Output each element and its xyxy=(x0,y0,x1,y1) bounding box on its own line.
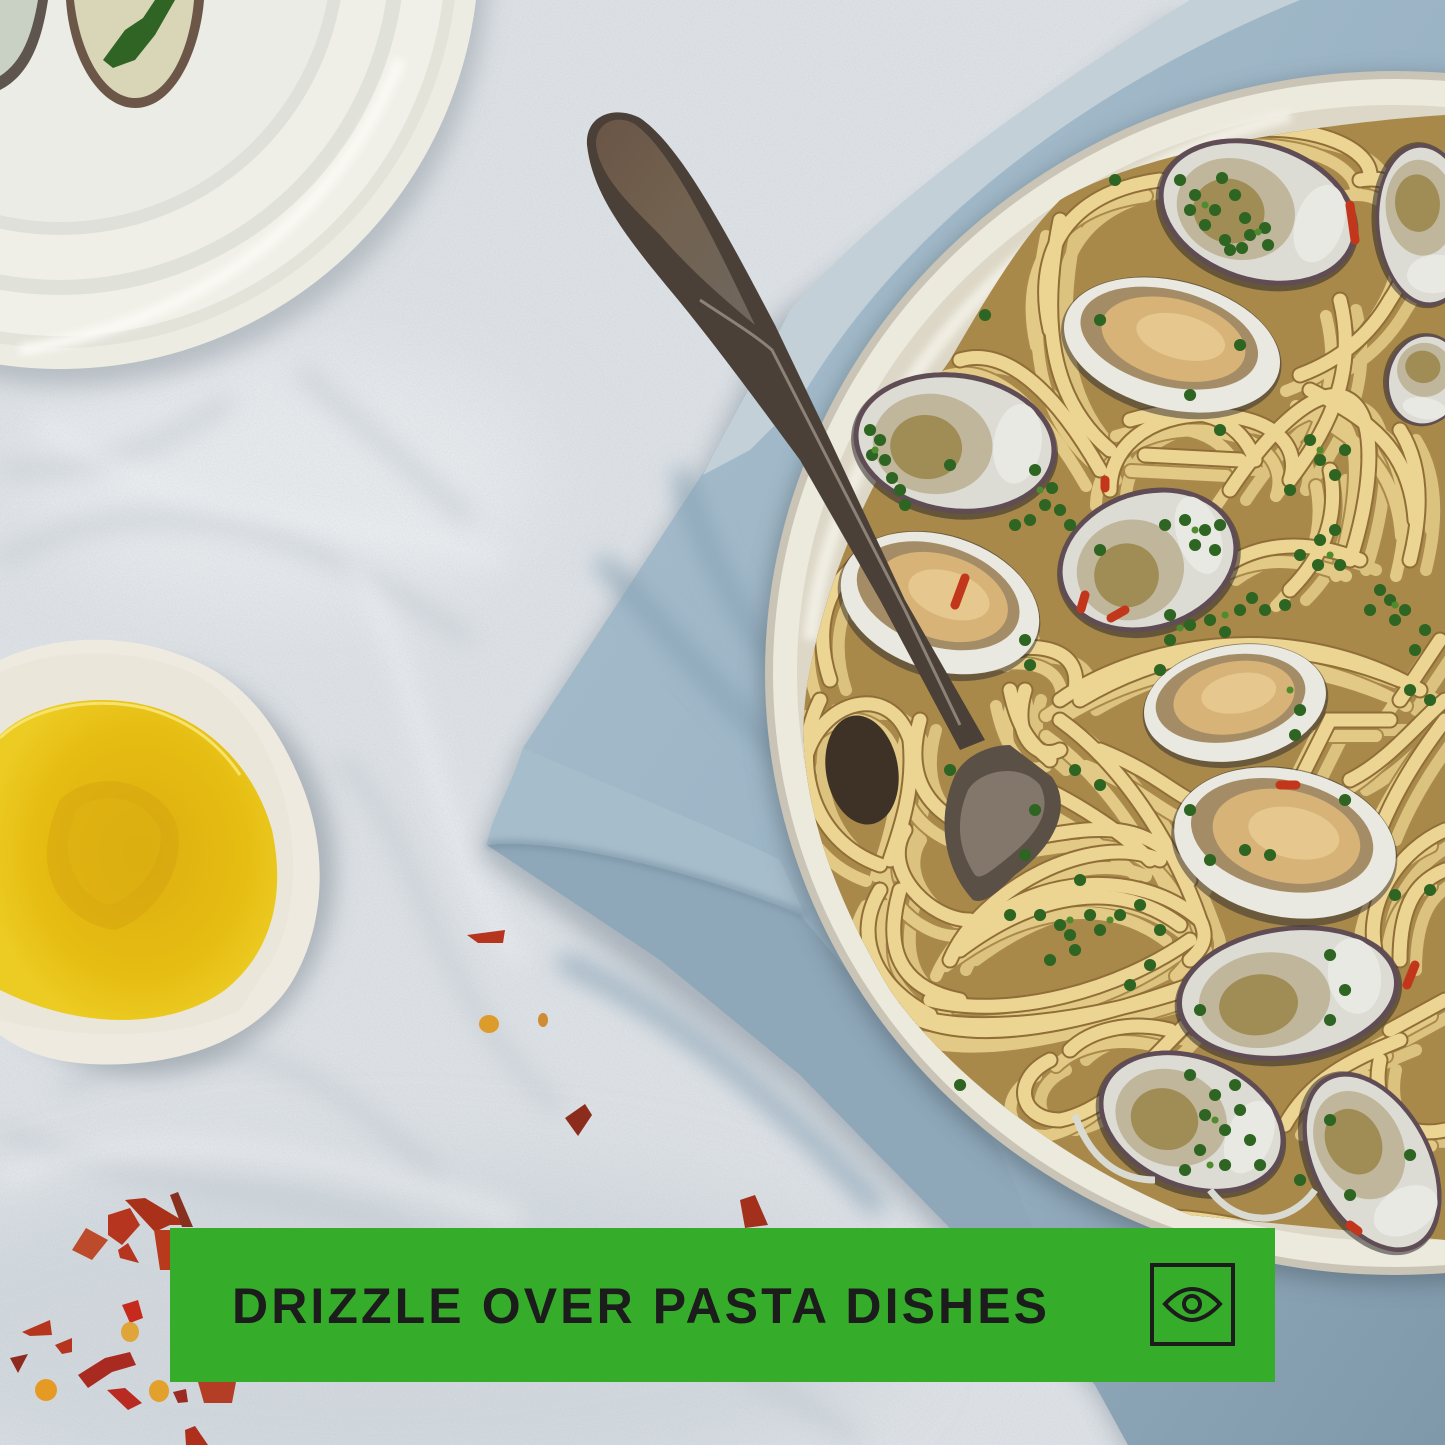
olive oil dish xyxy=(0,640,335,1075)
green banner xyxy=(170,1228,1275,1382)
chopped parsley xyxy=(870,178,1430,1195)
icon: eye in a square xyxy=(1152,1265,1233,1344)
linguine strands xyxy=(791,129,1445,1256)
bowl rim and wall xyxy=(765,71,1445,1275)
blue linen napkin xyxy=(481,0,1445,1445)
pasta sauce base xyxy=(804,115,1445,1240)
spoon resting in bowl xyxy=(587,112,1061,901)
chili flakes in bowl xyxy=(955,205,1415,1231)
olive oil pool xyxy=(0,700,277,1020)
white plate with clams, top left xyxy=(0,0,488,386)
clam shells on plate xyxy=(0,0,204,108)
large pasta bowl xyxy=(587,71,1445,1283)
banner heading: DRIZZLE OVER PASTA DISHES xyxy=(232,1278,1047,1334)
clams xyxy=(817,113,1445,1280)
scattered chili flakes xyxy=(10,930,768,1445)
serving tray edge under bowl xyxy=(703,0,1300,475)
